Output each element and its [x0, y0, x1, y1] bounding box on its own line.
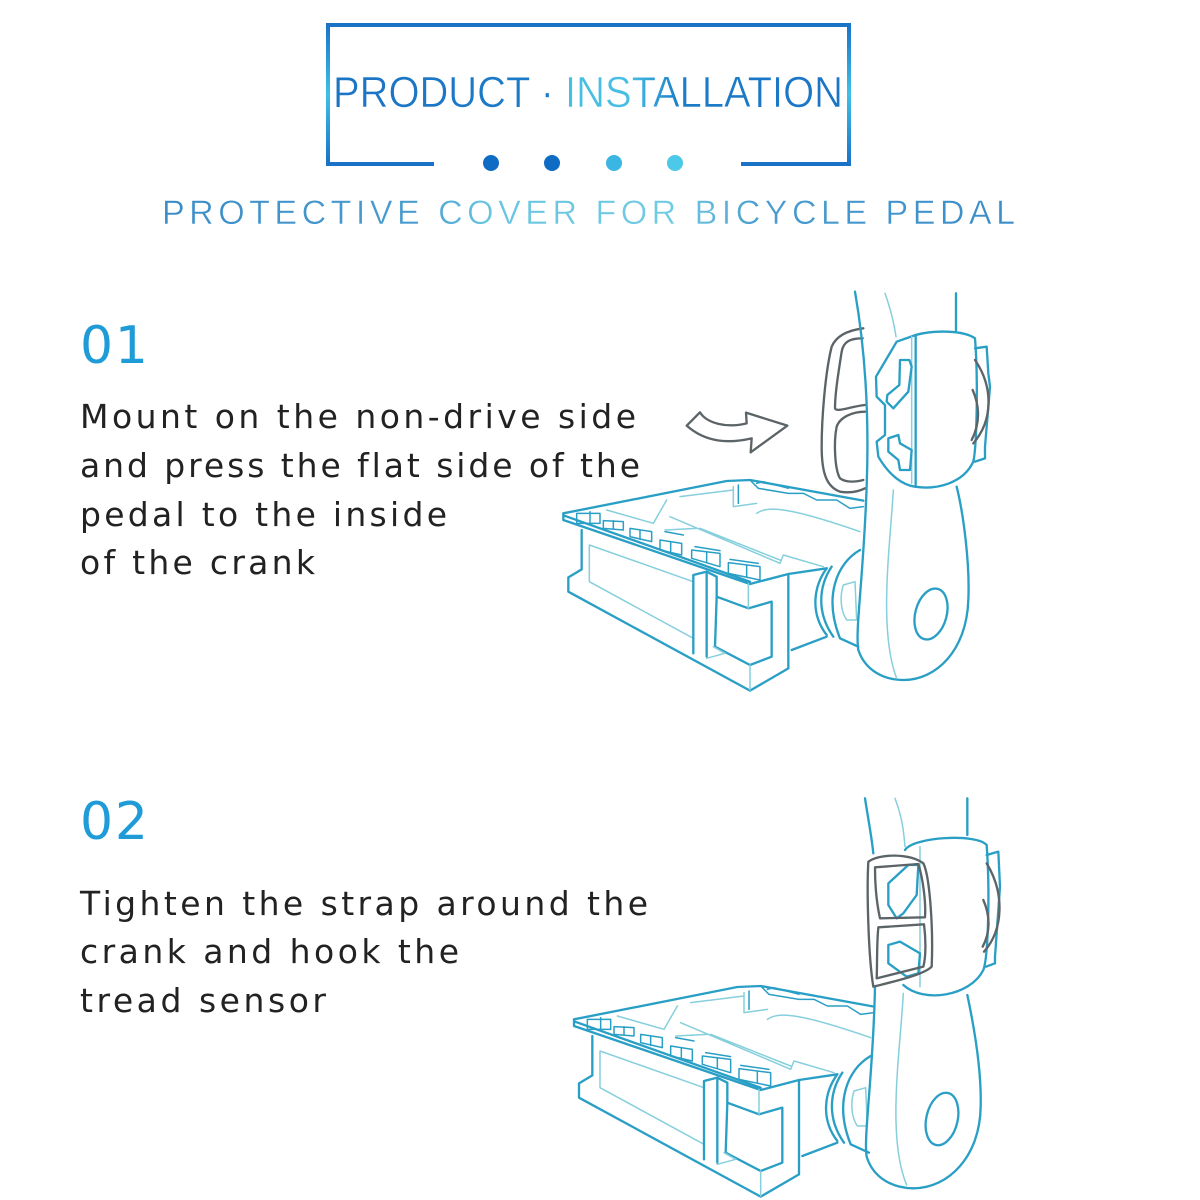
dot row [483, 155, 683, 171]
step 02 instructions: crank and hook the [80, 932, 459, 971]
crank arm [865, 798, 981, 1188]
arrow [687, 412, 787, 452]
step 01 number: 01 [80, 316, 148, 376]
step 01 instructions: Mount on the non-drive side [80, 397, 636, 436]
tread sensor housing [888, 838, 1000, 995]
tread sensor housing [876, 332, 990, 487]
step 01 instructions: of the crank [80, 543, 316, 582]
subtitle: PROTECTIVE COVER FOR BICYCLE PEDAL [162, 194, 1015, 232]
pedal [563, 480, 863, 691]
pedal [574, 986, 874, 1197]
step 02 instructions [79, 884, 648, 1020]
step 01 instructions: and press the flat side of the [80, 446, 640, 485]
title frame [328, 25, 849, 164]
title: PRODUCT · INSTALLATION [333, 68, 843, 117]
step 02 instructions: Tighten the strap around the [79, 884, 648, 923]
strap [822, 328, 865, 492]
step 02 instructions: tread sensor [80, 981, 326, 1020]
fitted strap [868, 856, 932, 987]
step 01 instructions [80, 397, 640, 582]
illustration: step 02 pedal, crank and fitted strap [574, 798, 1000, 1197]
illustration: step 01 pedal, crank and strap [563, 292, 990, 691]
header [162, 25, 1015, 232]
step 02 number: 02 [80, 792, 148, 852]
step 01 instructions: pedal to the inside [80, 495, 447, 534]
crank arm [855, 292, 969, 680]
